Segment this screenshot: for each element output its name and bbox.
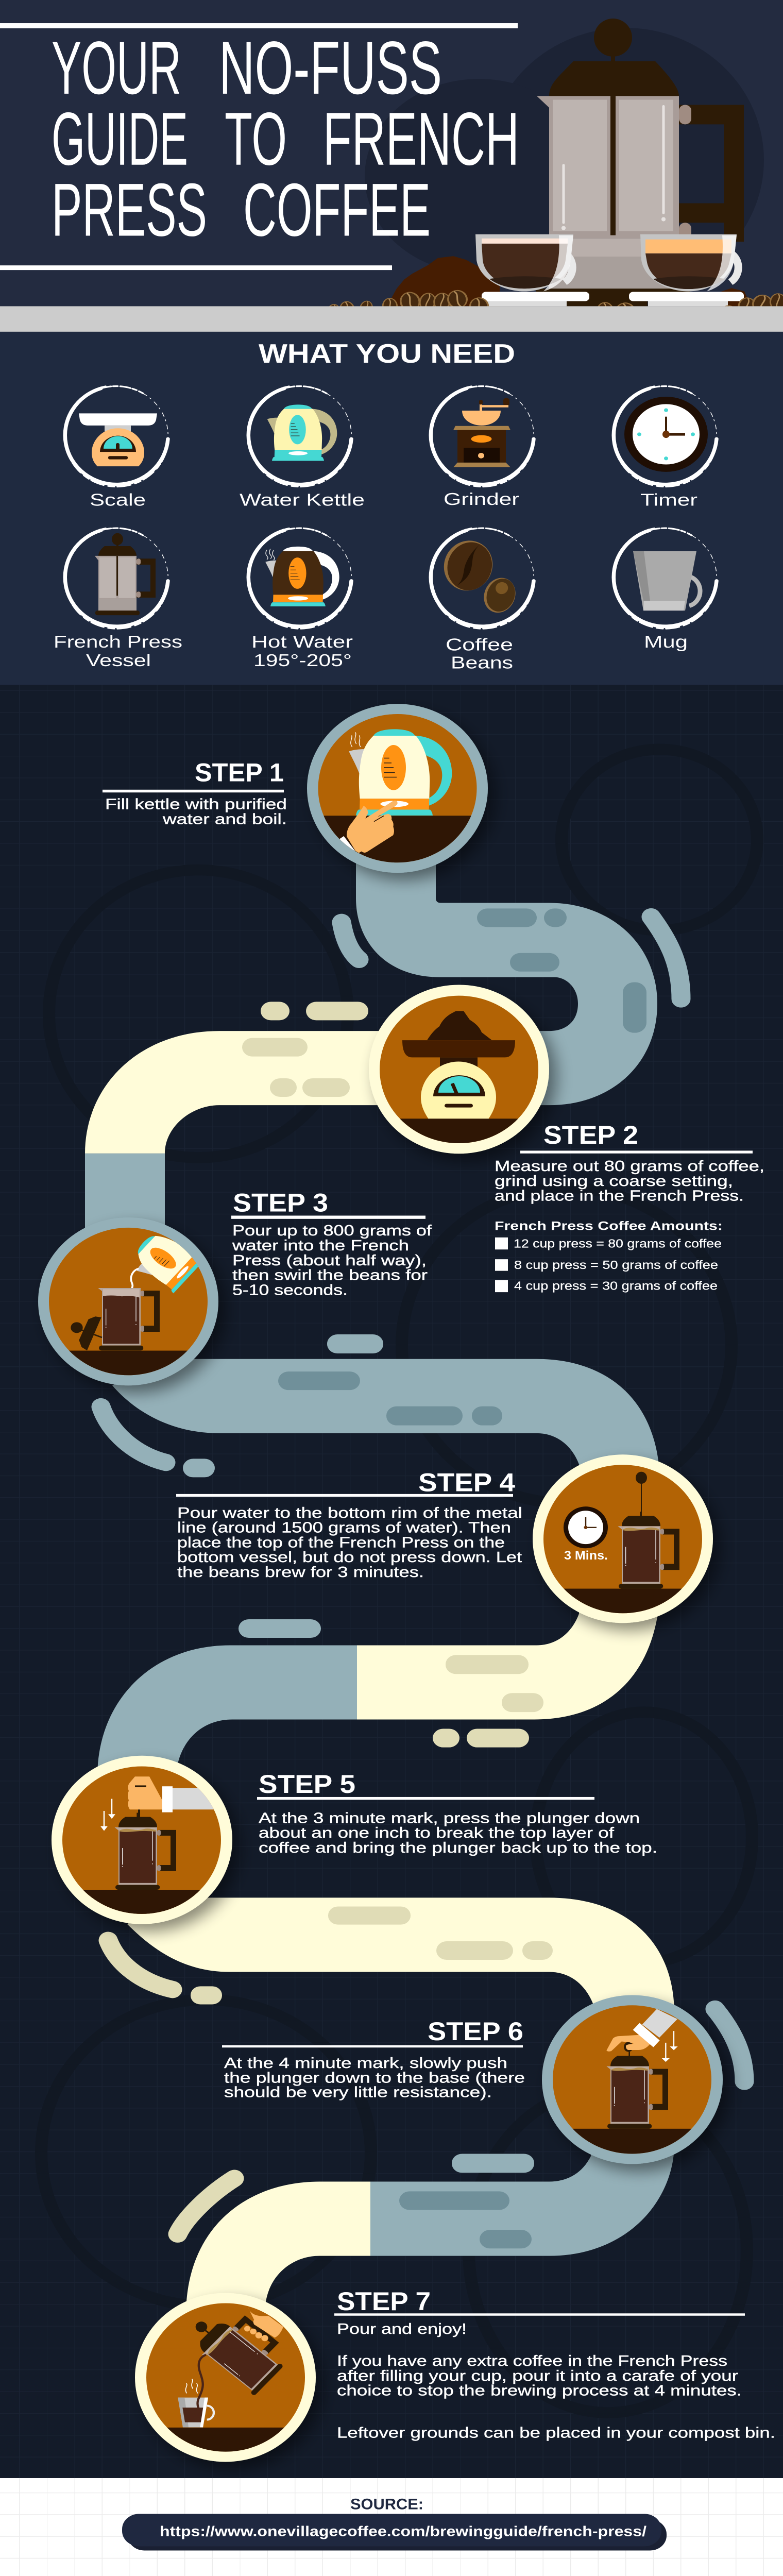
label: Coffee (446, 635, 513, 654)
saucer and cup right (629, 234, 744, 306)
item: scale (65, 386, 168, 510)
path: cream curve five (127, 1897, 674, 2014)
step 4 text: Pour water to the bottom rim of the metal (177, 1504, 522, 1521)
step 6 text: should be very little resistance). (224, 2084, 492, 2100)
step 3 circle (38, 1217, 218, 1385)
step 6 text: STEP 6 (428, 2017, 523, 2046)
step 2 text (495, 1121, 764, 1293)
step 7 circle (135, 2293, 316, 2462)
step 3 text: water into the French (232, 1238, 409, 1254)
step 7 text: If you have any extra coffee in the French Press (337, 2352, 727, 2369)
step 3 text: Press (about half way), (232, 1252, 427, 1268)
step 4 text: the beans brew for 3 minutes. (177, 1564, 424, 1581)
path: blue connector (85, 1154, 165, 1232)
step 1 text: water and boil. (162, 811, 287, 827)
lower rule (0, 265, 392, 270)
step 7 text: Pour and enjoy! (337, 2320, 467, 2337)
shelf (0, 306, 783, 332)
step 7 text: after filling your cup, pour it into a carafe of your (337, 2367, 738, 2384)
label: Scale (90, 490, 146, 510)
step 6 text: At the 4 minute mark, slowly push (224, 2055, 507, 2071)
source heading: SOURCE: (350, 2496, 423, 2513)
path: cream curve four (357, 1596, 660, 1720)
decoration: road pills cream (191, 1002, 553, 2004)
coffee amounts list: 8 cup press = 50 grams of coffee (514, 1259, 718, 1272)
title: FRENCH (323, 96, 519, 181)
step 4 circle (533, 1454, 713, 1623)
mug (207, 2405, 214, 2420)
top rule (0, 23, 518, 28)
label: Mug (644, 633, 688, 652)
step 5 text (257, 1770, 657, 1856)
step 3 text (231, 1189, 432, 1298)
item: timer (614, 386, 717, 510)
panel: steps background (0, 685, 783, 2478)
path: blue curve three (112, 1359, 660, 1485)
step 4 text: place the top of the French Press on the (177, 1534, 505, 1551)
step 1 text: STEP 1 (195, 758, 284, 787)
source link pill (122, 2514, 667, 2550)
title: NO-FUSS (219, 25, 442, 110)
step 3 text: 5-10 seconds. (232, 1282, 348, 1298)
step 7 text: Leftover grounds can be placed in your compost bin. (337, 2425, 775, 2441)
coffee amounts list: 12 cup press = 80 grams of coffee (514, 1238, 722, 1250)
step 2 circle (369, 985, 549, 1154)
coffee beans (325, 287, 783, 323)
step 2 text: STEP 2 (543, 1121, 638, 1149)
item: french press vessel (54, 528, 182, 670)
step 4 text: line (around 1500 grams of water). Then (177, 1519, 511, 1536)
decoration: road pills blue (278, 908, 646, 2248)
decoration: outside marks blue (101, 917, 744, 2173)
source link pill: https://www.onevillagecoffee.com/brewingguide/french-press/ (160, 2523, 646, 2539)
path: cream curve six (186, 2182, 370, 2315)
step 4 text: bottom vessel, but do not press down. Let (177, 1549, 522, 1566)
step 4 text: STEP 4 (418, 1468, 515, 1497)
label line 2: Beans (451, 653, 513, 672)
item: grinder (431, 386, 534, 509)
step 3 text: STEP 3 (233, 1189, 328, 1217)
heading: what you need: WHAT YOU NEED (259, 338, 515, 369)
item: water kettle (240, 386, 365, 510)
coffee amounts list: 4 cup press = 30 grams of coffee (514, 1280, 718, 1293)
illustration: french press (536, 19, 744, 306)
panel: source footer (0, 2478, 783, 2576)
label: Timer (640, 490, 697, 510)
clock (564, 1506, 608, 1548)
step 3 text: then swirl the beans for (232, 1267, 428, 1283)
coffee amounts list: French Press Coffee Amounts: (495, 1219, 723, 1233)
title: PRESS (52, 167, 207, 252)
step 5 text: STEP 5 (259, 1770, 355, 1799)
step 2 text: and place in the French Press. (495, 1188, 744, 1204)
title: COFFEE (243, 167, 431, 252)
saucer and cup left (475, 234, 589, 306)
clock caption: 3 Mins. (564, 1549, 608, 1563)
coffee stains (41, 749, 757, 2413)
title: TO (225, 96, 287, 181)
item: mug (614, 528, 717, 652)
title (52, 25, 519, 252)
label: Hot Water (251, 633, 353, 652)
hand (128, 1776, 162, 1809)
label: French Press (54, 633, 182, 652)
label line 2: Vessel (86, 651, 151, 670)
step 6 text (222, 2017, 525, 2100)
label: Water Kettle (240, 490, 365, 510)
item: coffee beans (431, 528, 534, 672)
path: blue curve one (356, 858, 657, 1105)
coffee grounds pile (389, 256, 751, 306)
step 2 text: Measure out 80 grams of coffee, (495, 1158, 764, 1175)
item: hot water (248, 528, 353, 670)
step 4 text (176, 1468, 522, 1581)
label line 2: 195°-205° (253, 651, 352, 670)
step 6 circle (542, 1995, 723, 2164)
step 5 text: about an one inch to break the top layer of (259, 1825, 615, 1841)
step 7 text: STEP 7 (337, 2287, 431, 2316)
step 5 text: At the 3 minute mark, press the plunger down (259, 1810, 640, 1826)
step 1 circle (307, 704, 488, 873)
step 1 text (103, 758, 287, 827)
hero panel (0, 0, 783, 332)
title: GUIDE (52, 96, 188, 181)
step 7 text: choice to stop the brewing process at 4 minutes. (337, 2382, 742, 2399)
title: YOUR (52, 25, 181, 110)
decoration: outside marks cream (108, 1940, 234, 2234)
path: cream curve two (85, 1031, 412, 1154)
path: blue curve six (370, 2144, 674, 2256)
step 5 text: coffee and bring the plunger back up to the top. (259, 1839, 657, 1856)
panel: what you need (0, 332, 783, 685)
background blobs (365, 28, 764, 292)
step 1 text: Fill kettle with purified (105, 796, 287, 812)
step 3 text: Pour up to 800 grams of (232, 1223, 432, 1239)
step 7 text (334, 2287, 775, 2441)
step 6 text: the plunger down to the base (there (224, 2070, 525, 2086)
coffee amounts list (495, 1219, 723, 1293)
step 2 text: grind using a coarse setting, (495, 1173, 733, 1189)
step 5 circle (52, 1756, 232, 1924)
path: blue curve four (97, 1645, 357, 1777)
label: Grinder (444, 489, 519, 509)
